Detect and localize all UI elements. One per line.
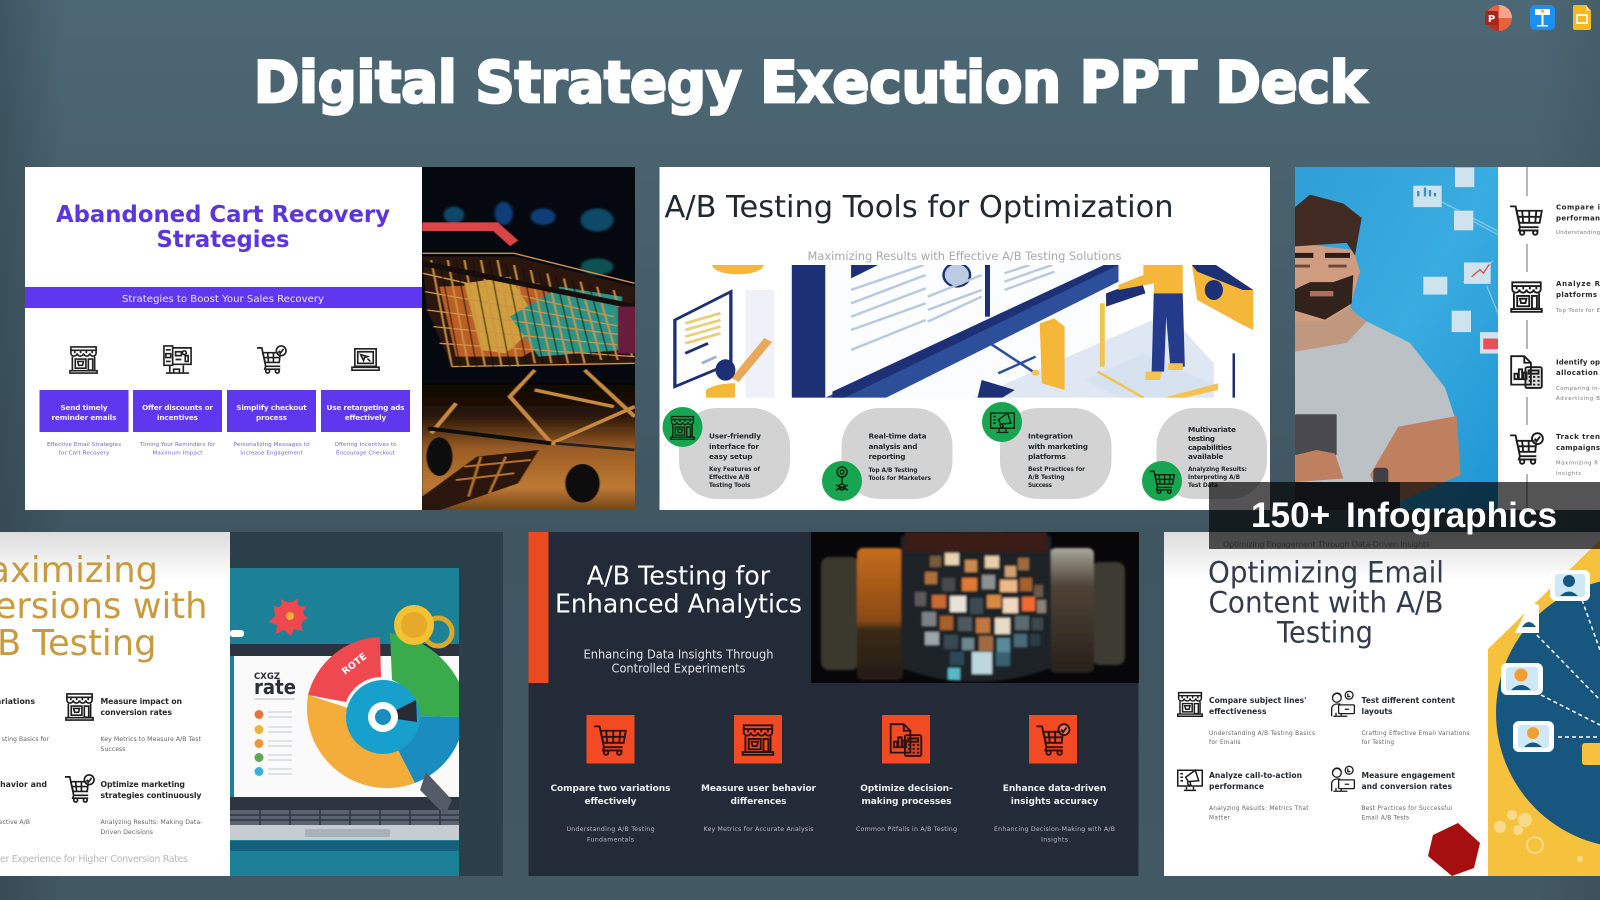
column: enhance: Enhancing Decision-Making with A/B — [994, 826, 1115, 833]
photo: data cylinders — [811, 531, 1139, 683]
strategy captions: Maximum Impact — [152, 450, 203, 456]
list item: measure impact: Key Metrics to Measure A/B Test — [100, 736, 202, 743]
donut chart — [307, 633, 459, 815]
feature pill 3: platforms — [1028, 452, 1066, 461]
column: enhance: insights accuracy — [1011, 797, 1098, 807]
timeline text: Understanding — [1556, 230, 1600, 236]
strategy captions: Personalizing Messages to — [234, 442, 310, 448]
timeline text: Top Tools for E — [1555, 308, 1600, 314]
illustration: email network — [1488, 540, 1600, 876]
subtitle: enhanced analytics: Enhancing Data Insights Through — [584, 648, 774, 662]
item: content layouts: Test different content — [1362, 696, 1455, 705]
strategy buttons: Send timely — [60, 403, 108, 412]
item: engagement: Best Practices for Successful — [1362, 806, 1452, 812]
banner: 150+ infographics — [1209, 482, 1600, 549]
feature pill 4 — [1142, 408, 1267, 501]
vertical timeline — [1526, 167, 1528, 510]
banner: 150+ infographics: 150+ Infographics — [1251, 496, 1557, 535]
list item: optimize marketing: strategies continuously — [100, 791, 202, 800]
feature pill 2: reporting — [868, 452, 906, 461]
column: measure: Measure user behavior — [701, 784, 817, 794]
icon: yellow gear — [394, 605, 452, 646]
column: compare: Compare two variations — [550, 784, 670, 794]
list item: optimize marketing: Analyzing Results: Making Data- — [100, 819, 202, 826]
subtitle: enhanced analytics: Controlled Experiments — [612, 662, 746, 676]
panel: maximizing conversions — [0, 532, 503, 876]
panel: A/B testing tools — [660, 167, 1270, 510]
strategy captions: for Cart Recovery — [59, 450, 110, 456]
red hexagon — [1428, 823, 1480, 876]
feature pill 2: Top A/B Testing — [868, 468, 918, 474]
strategy buttons: reminder emails — [52, 413, 116, 422]
strategy captions: Timing Your Reminders for — [139, 442, 216, 448]
feature pill 4: capabilities — [1188, 443, 1232, 452]
title: Digital Strategy Execution PPT Deck — [254, 50, 1367, 116]
timeline text: Advertising B — [1556, 396, 1600, 402]
item: call-to-action — [1178, 770, 1309, 822]
avatar cards — [1501, 570, 1590, 752]
timeline icons — [1510, 206, 1543, 464]
column: optimize: making processes — [862, 797, 952, 807]
icon: Google Slides — [1573, 5, 1591, 30]
hidden subtitle under band: Optimizing Engagement Through Data-Driven Insights — [1223, 540, 1430, 549]
panel: A/B testing for enhanced analytics — [528, 531, 1139, 876]
feature pill 1: interface for — [709, 442, 759, 451]
column: measure: Key Metrics for Accurate Analysis — [704, 826, 814, 833]
column: optimize: Common Pitfalls in A/B Testing — [856, 826, 957, 833]
timeline text: performan — [1556, 214, 1600, 222]
legend: rate: rate — [254, 675, 296, 699]
timeline text: campaigns — [1556, 444, 1600, 452]
feature pill 3: Success — [1028, 483, 1053, 489]
column: compare — [550, 715, 670, 844]
left list fragments: sting Basics for — [2, 736, 49, 743]
feature pill 4: Interpreting A/B — [1188, 475, 1241, 481]
column: optimize: Optimize decision- — [860, 784, 953, 794]
item: subject lines: Compare subject lines' — [1209, 696, 1306, 705]
subtitle band: Strategies to Boost Your Sales Recovery — [122, 294, 324, 305]
timeline text: Compare i — [1556, 204, 1600, 212]
footer note: er Experience for Higher Conversion Rates — [0, 854, 188, 865]
item: content layouts: layouts — [1362, 707, 1393, 716]
heading: optimizing email — [1208, 556, 1444, 650]
heading: enhanced analytics: A/B Testing for — [587, 562, 771, 592]
item: content layouts: for Testing — [1362, 740, 1394, 746]
timeline text: Comparing In- — [1556, 386, 1600, 392]
strategy captions: Encourage Checkout — [336, 450, 396, 456]
subtitle: enhanced analytics — [584, 648, 774, 676]
heading: maximizing conversions — [0, 550, 208, 664]
heading: abandoned cart: Abandoned Cart Recovery — [56, 202, 390, 228]
timeline text: Identify op — [1556, 358, 1600, 366]
list item: measure impact: Success — [100, 746, 126, 753]
timeline text: Insights — [1556, 471, 1581, 477]
feature pill 4: Multivariate — [1188, 425, 1236, 434]
timeline text — [1555, 204, 1600, 477]
column: optimize — [856, 715, 957, 833]
list item: optimize marketing: Optimize marketing — [100, 780, 185, 789]
feature pill 3: Best Practices for — [1028, 467, 1085, 473]
legend: rate — [254, 672, 296, 776]
column: enhance — [994, 715, 1115, 844]
item: engagement: Measure engagement — [1362, 771, 1455, 780]
feature pill 2: analysis and — [868, 442, 918, 451]
heading: enhanced analytics — [555, 562, 802, 620]
timeline text: Maximizing R — [1556, 460, 1598, 466]
feature pill 3: A/B Testing — [1028, 475, 1064, 481]
subtitle: Maximizing Results with Effective A/B Testing Solutions — [808, 249, 1122, 263]
icon: PowerPoint: P — [1488, 14, 1495, 25]
heading: optimizing email: Content with A/B — [1208, 586, 1444, 620]
feature pill 1 — [662, 407, 790, 499]
item: call-to-action: Analyzing Results: Metrics That — [1209, 806, 1309, 812]
photo: man with tablet — [1295, 167, 1500, 529]
list item: optimize marketing: Driven Decisions — [100, 829, 153, 836]
left list fragments — [0, 697, 49, 826]
column: enhance: Enhance data-driven — [1003, 784, 1106, 794]
item: engagement — [1332, 766, 1455, 822]
feature pill 2: Real-time data — [868, 432, 927, 440]
column: enhance: Insights — [1041, 836, 1068, 844]
heading: optimizing email: Optimizing Email — [1208, 556, 1444, 590]
feature pill 1: Testing Tools — [709, 483, 751, 489]
item: subject lines — [1178, 693, 1315, 746]
list item: optimize marketing — [65, 775, 202, 836]
heading: abandoned cart: Strategies — [156, 227, 290, 253]
column: measure: differences — [730, 797, 786, 807]
item: subject lines: effectiveness — [1209, 707, 1267, 716]
item: call-to-action: Analyze call-to-action — [1209, 771, 1302, 780]
strategy captions: Offering Incentives to — [334, 442, 397, 448]
icon: red gear — [269, 598, 308, 636]
item: engagement: Email A/B Tests — [1362, 816, 1409, 822]
heading: optimizing email: Testing — [1276, 616, 1373, 650]
feature pill 4: testing — [1188, 434, 1215, 443]
subtitle band — [25, 287, 422, 308]
feature pill 1: easy setup — [709, 452, 752, 461]
icon: PowerPoint — [1485, 5, 1512, 31]
item: call-to-action: performance — [1209, 782, 1264, 791]
icon row — [70, 346, 379, 373]
column: compare: Fundamentals — [587, 836, 634, 844]
feature pill 2 — [822, 408, 952, 501]
strategy buttons: process — [256, 413, 287, 422]
strategy buttons: Simplify checkout — [236, 403, 307, 412]
list item: measure impact: conversion rates — [100, 708, 172, 717]
strategy buttons: effectively — [345, 413, 386, 422]
strategy buttons — [40, 390, 410, 432]
item: content layouts — [1332, 691, 1470, 746]
heading: enhanced analytics: Enhanced Analytics — [555, 590, 802, 620]
feature pill 2: Tools for Marketers — [868, 476, 932, 482]
feature pill 4: available — [1188, 452, 1224, 461]
strategy captions: Increase Engagement — [240, 450, 304, 456]
illustration: conversion rate laptop — [230, 568, 459, 876]
timeline text: Analyze R — [1556, 280, 1600, 288]
panel: abandoned cart recovery — [25, 167, 638, 513]
left list fragments: havior and — [0, 780, 47, 789]
timeline text: Track tren — [1556, 433, 1600, 441]
isometric illustration — [675, 256, 1253, 398]
column: compare: Understanding A/B Testing — [566, 826, 655, 833]
list item: measure impact: Measure impact on — [100, 697, 182, 706]
heading: A/B testing tools: A/B Testing Tools for Optimization — [664, 190, 1174, 225]
feature pill 1: Key Features of — [709, 467, 760, 473]
feature pill 4: Test Data — [1188, 483, 1218, 489]
strategy captions — [47, 442, 397, 456]
feature pill 3: Integration — [1028, 432, 1073, 440]
feature pill 1: User-friendly — [709, 432, 761, 440]
item: content layouts: Crafting Effective Email Variations — [1362, 731, 1470, 737]
strategy captions: Effective Email Strategies — [47, 442, 121, 448]
feature pill 3 — [982, 402, 1112, 499]
panel: budget and ROI — [1295, 167, 1600, 529]
icon: Keynote — [1530, 5, 1555, 30]
feature pill 1: Effective A/B — [709, 475, 750, 481]
column: measure — [701, 715, 817, 833]
item: engagement: and conversion rates — [1362, 782, 1452, 791]
item: call-to-action: Matter — [1209, 816, 1231, 822]
item: subject lines: for Emails — [1209, 740, 1240, 746]
item: subject lines: Understanding A/B Testing Basics — [1209, 731, 1315, 737]
feature pill 4: Analyzing Results: — [1188, 467, 1247, 473]
heading: abandoned cart — [56, 202, 390, 253]
timeline text: platforms — [1556, 291, 1597, 299]
feature pill 3: with marketing — [1028, 442, 1088, 451]
strategy buttons: Use retargeting ads — [326, 403, 404, 412]
strategy buttons: Offer discounts or — [142, 403, 213, 412]
column: compare: effectively — [584, 797, 637, 807]
panel: optimizing email content — [1164, 532, 1600, 876]
donut chart: ROTE — [340, 651, 369, 677]
photo: shopping cart — [422, 167, 638, 513]
strategy buttons: incentives — [157, 413, 198, 422]
legend: rate: CXGZ — [254, 672, 280, 682]
timeline text: allocation — [1556, 369, 1598, 377]
list item: measure impact — [66, 694, 202, 753]
